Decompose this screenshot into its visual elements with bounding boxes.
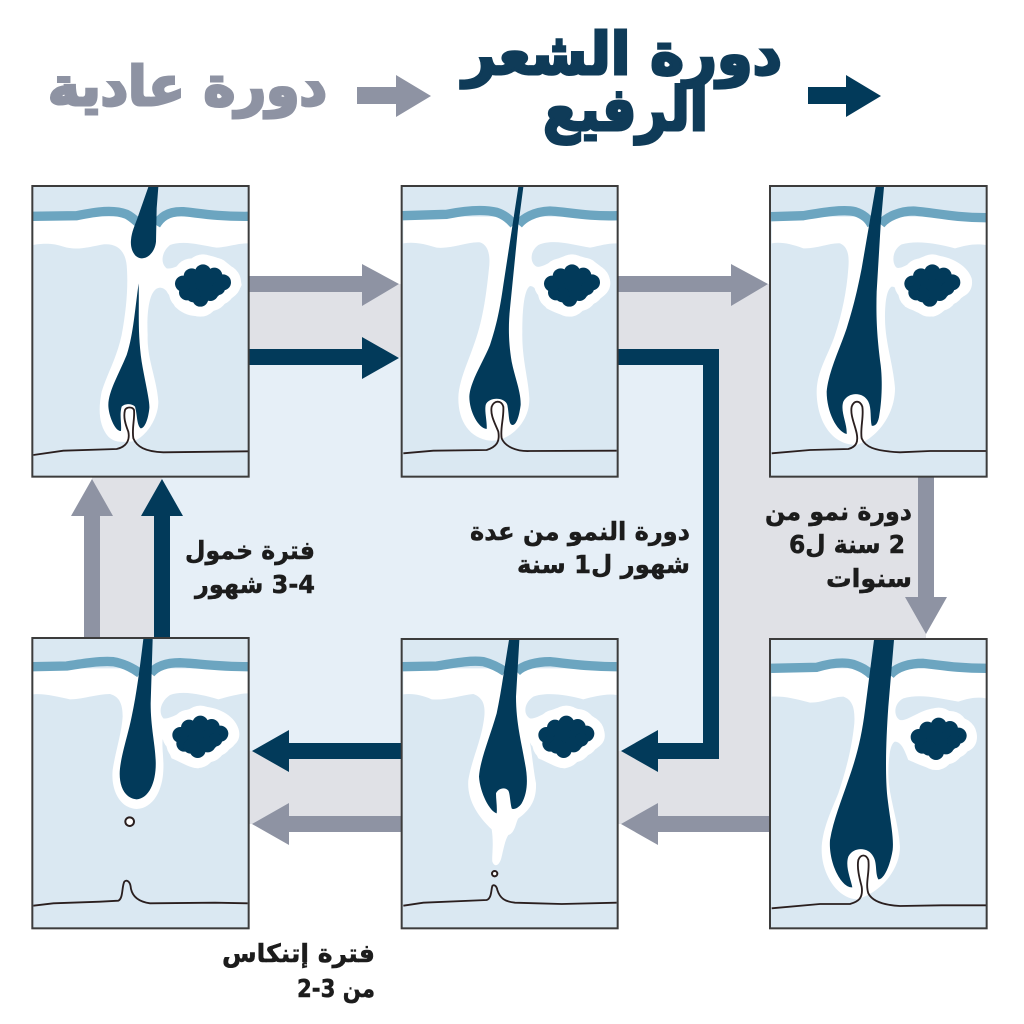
label: rest period: فترة خمول (185, 536, 315, 566)
heading: thinning hair cycle (460, 20, 782, 145)
label: normal growth period (765, 497, 912, 594)
panel: catagen regression (402, 639, 618, 928)
background: light blue inner area (162, 357, 711, 751)
arrow: grey top 1 (249, 264, 399, 306)
panel: mid growth (770, 186, 987, 477)
label: rest period: 3-4 شهور (193, 570, 315, 600)
label: rest period (185, 536, 315, 600)
panel: early growth (402, 186, 618, 477)
label: normal growth period: سنوات (826, 564, 912, 594)
label: thinning growth period (470, 517, 690, 580)
label: thinning growth period: شهور ل1 سنة (517, 550, 690, 580)
background: grey cycle area (92, 284, 926, 824)
arrow: grey top 2 (617, 264, 768, 306)
arrow: thinning cycle legend (808, 75, 881, 117)
label: regression period: من 3-2 (297, 974, 375, 1004)
label: normal growth period: 2 سنة ل6 (789, 530, 905, 559)
arrow: navy up (141, 479, 183, 638)
panel: telogen to early anagen (32, 186, 249, 477)
label: thinning growth period: دورة النمو من عدة (470, 517, 690, 547)
arrow: grey bottom left (252, 803, 402, 845)
arrow: grey bottom right (621, 803, 770, 845)
panel: full growth (770, 639, 987, 928)
arrow: grey down (905, 477, 947, 634)
arrow: normal cycle legend (357, 75, 431, 117)
arrow: navy long elbow (617, 349, 719, 772)
label: regression period (222, 939, 375, 1004)
arrow: grey up (71, 479, 113, 638)
panel: telogen rest (32, 638, 249, 928)
arrow: navy top 1 (249, 337, 399, 379)
label: normal growth period: دورة نمو من (765, 497, 912, 527)
arrow: navy bottom left (252, 730, 402, 772)
label: regression period: فترة إتنكاس (222, 939, 375, 969)
heading: thinning hair cycle: دورة الشعر (460, 20, 782, 89)
heading: normal cycle: دورة عادية (48, 55, 327, 118)
heading: thinning hair cycle: الرفيع (543, 75, 708, 145)
